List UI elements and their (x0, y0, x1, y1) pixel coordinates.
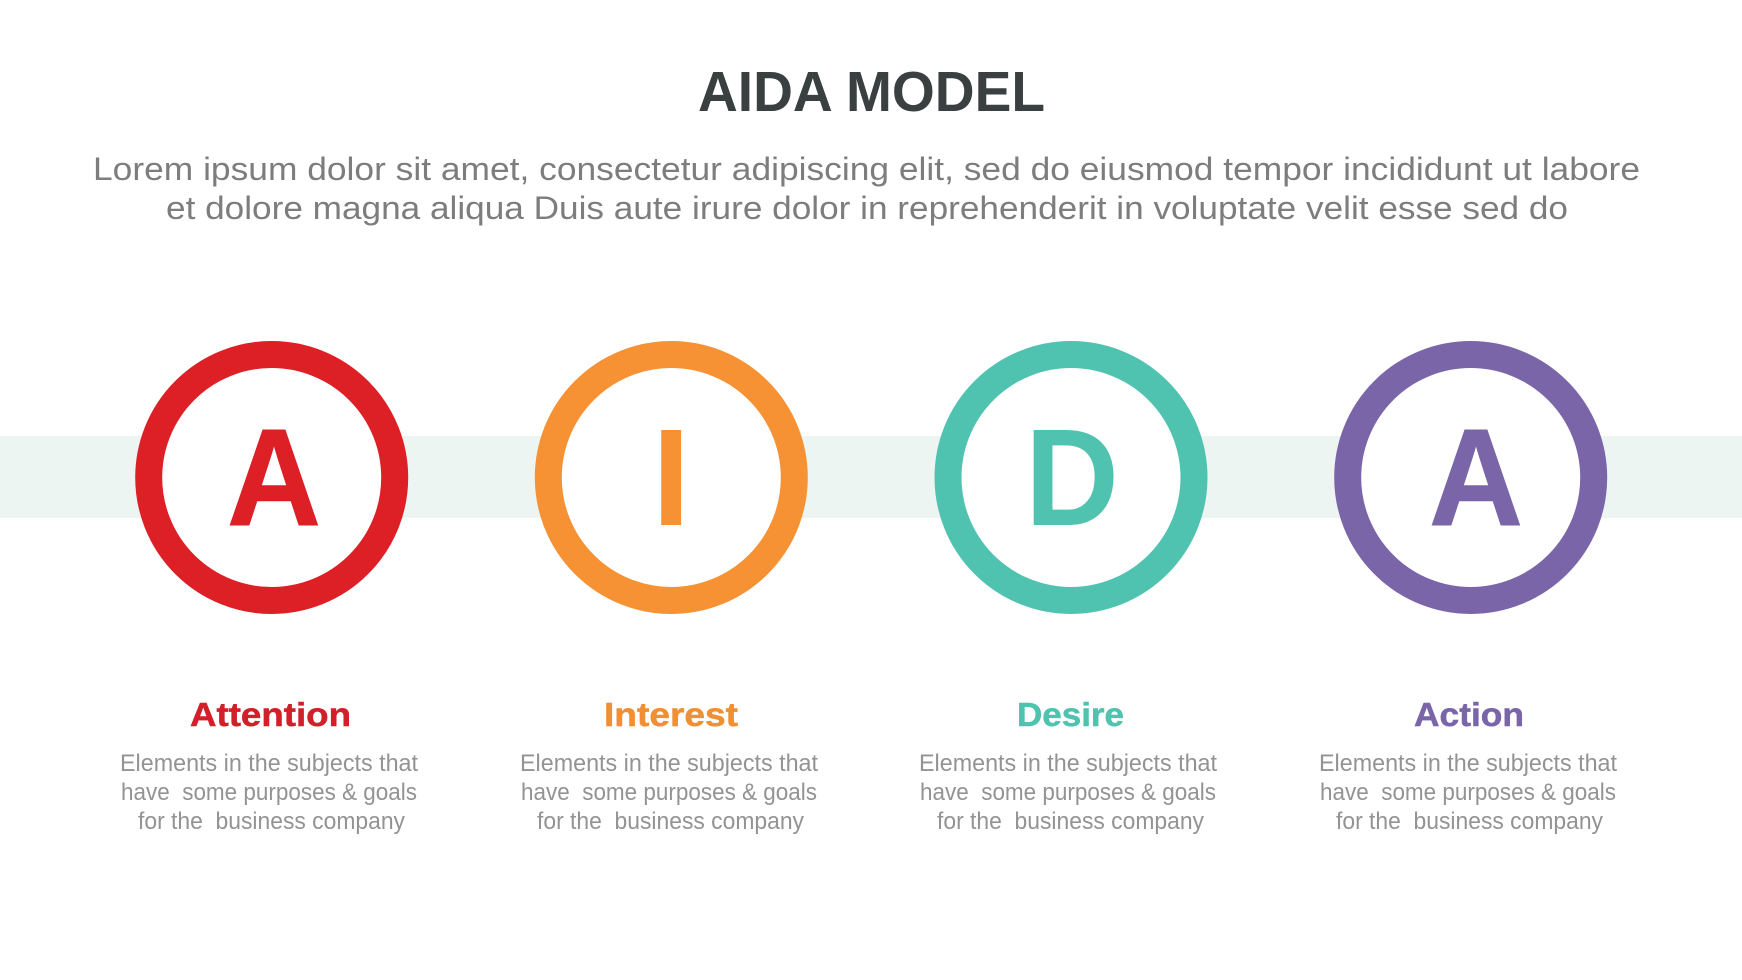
description: Attention: have some purposes & goals (121, 779, 417, 806)
icon: ring A: A (1429, 401, 1523, 555)
title: AIDA MODEL (698, 61, 1045, 124)
description: Interest: Elements in the subjects that (520, 750, 818, 777)
step: Desire (919, 354, 1217, 835)
description: Interest (520, 750, 818, 835)
subtitle text: Lorem ipsum dolor sit amet, consectetur adipiscing elit, sed do eiusmod tempor incididunt ut labore (93, 151, 1640, 187)
description: Action: for the business company (1336, 808, 1603, 835)
description: Interest: for the business company (537, 808, 804, 835)
subtitle text: et dolore magna aliqua Duis aute irure dolor in reprehenderit in voluptate velit esse sed do (166, 190, 1568, 226)
heading: Interest: Interest (604, 696, 738, 733)
description: Attention (120, 750, 418, 835)
description: Desire: Elements in the subjects that (919, 750, 1217, 777)
description: Desire (919, 750, 1217, 835)
icon: ring D: D (1025, 401, 1119, 555)
heading: Attention: Attention (190, 696, 351, 733)
icon: ring D (948, 354, 1194, 600)
icon: ring I (548, 354, 794, 600)
description: Action: Elements in the subjects that (1319, 750, 1617, 777)
description: Interest: have some purposes & goals (521, 779, 817, 806)
subtitle text (93, 151, 1640, 226)
step: Interest (520, 354, 818, 835)
icon: ring A: A (227, 401, 321, 555)
icon: ring A (149, 354, 395, 600)
step: Attention (120, 354, 418, 835)
description: Desire: for the business company (937, 808, 1204, 835)
icon: ring A (1348, 354, 1594, 600)
description: Desire: have some purposes & goals (920, 779, 1216, 806)
heading: Action: Action (1414, 696, 1524, 733)
description: Attention: Elements in the subjects that (120, 750, 418, 777)
description: Action (1319, 750, 1617, 835)
background band (0, 436, 1742, 518)
description: Attention: for the business company (138, 808, 405, 835)
heading: Desire: Desire (1017, 696, 1124, 733)
description: Action: have some purposes & goals (1320, 779, 1616, 806)
step: Action (1319, 354, 1617, 835)
icon: ring I: I (652, 401, 690, 555)
